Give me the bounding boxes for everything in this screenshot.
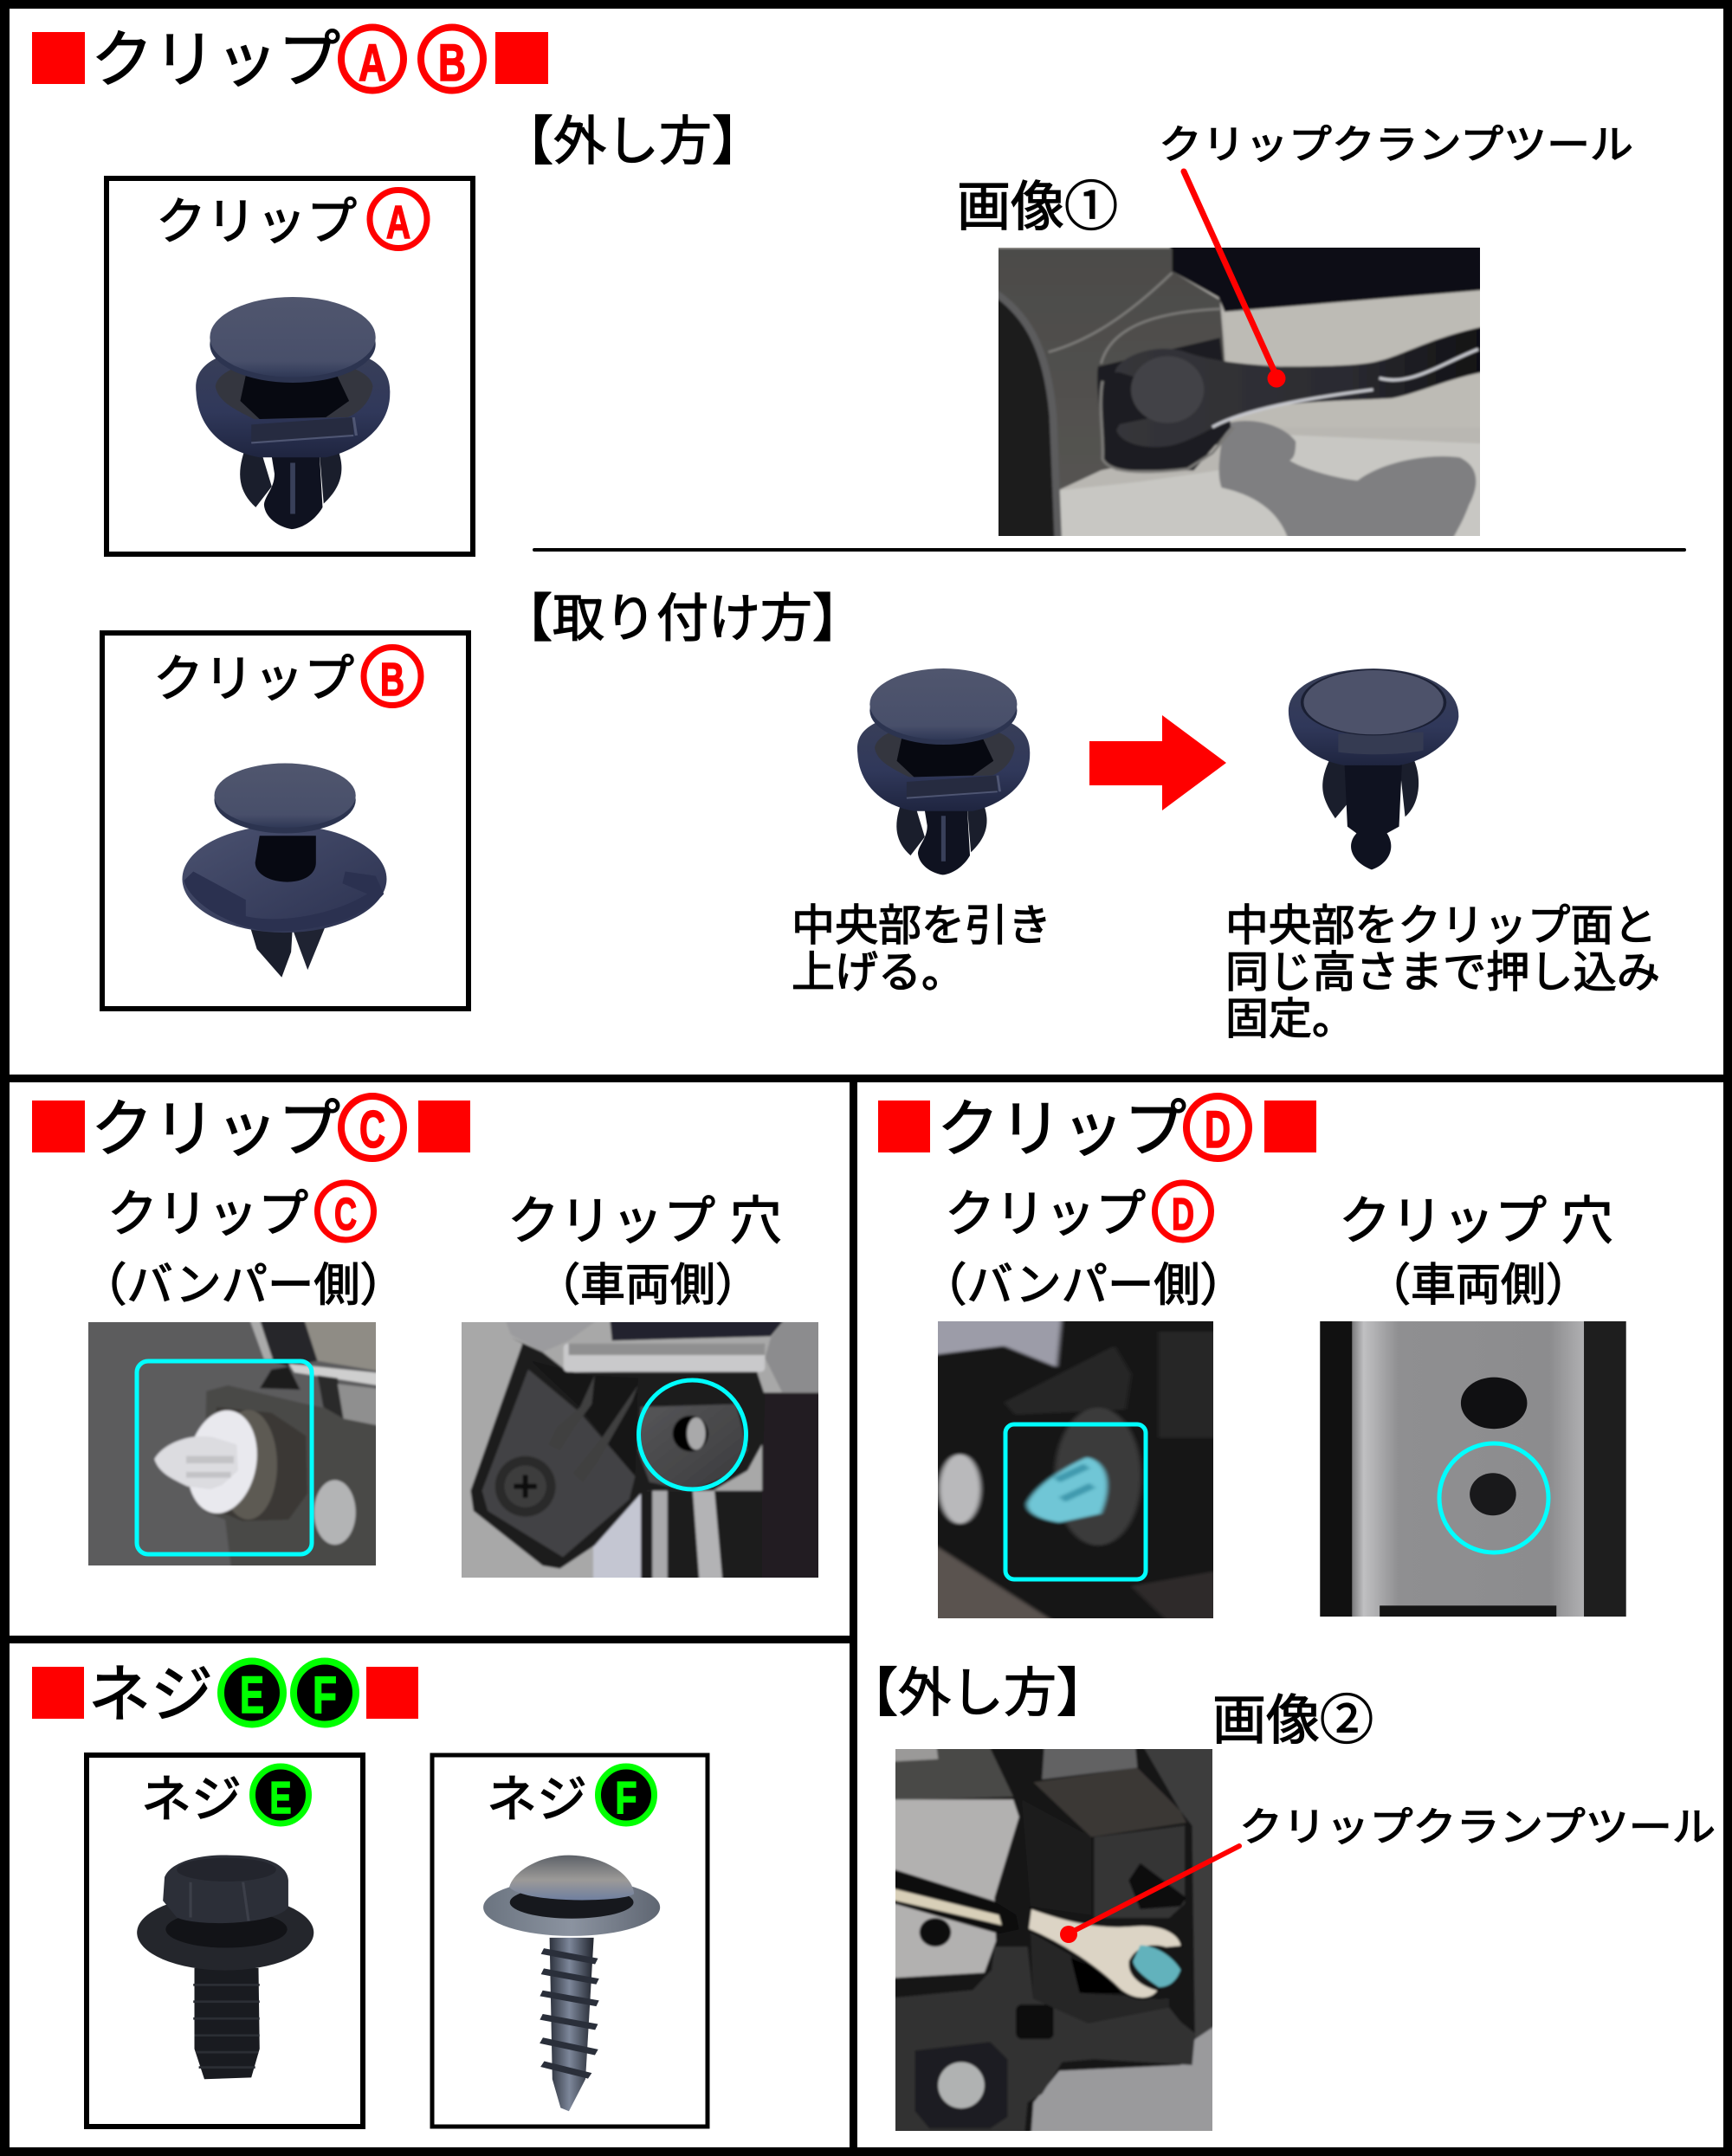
label: clip hole vehicle side <box>1339 1192 1613 1311</box>
panel: screws E F <box>32 1661 708 2127</box>
text: press in <box>1225 901 1660 1043</box>
heading: screws <box>32 1661 418 1730</box>
label: clip D bumper side: D <box>1172 1190 1194 1240</box>
label: image 2: 画像② <box>1212 1691 1373 1751</box>
label: clip C bumper side: （バンパー側） <box>81 1260 406 1311</box>
text: pull up <box>792 901 1051 997</box>
photo: clip B <box>182 763 386 978</box>
panel: clip C <box>32 1095 831 1589</box>
heading: clip A B <box>32 26 548 95</box>
highlight: clip C <box>137 1361 312 1554</box>
box: clip A: クリップ <box>156 194 357 250</box>
heading: screws: E <box>240 1666 264 1724</box>
heading: clip A B: クリップ <box>91 26 340 95</box>
box: clip B <box>102 633 469 1009</box>
box: screw F <box>432 1755 708 2127</box>
heading: clip D: D <box>1205 1101 1231 1159</box>
heading: screws: F <box>313 1666 337 1724</box>
arrow: leader line to tool (image 2) <box>1060 1846 1239 1943</box>
heading: clip D: クリップ <box>937 1095 1186 1165</box>
box: screw E <box>87 1755 363 2127</box>
heading: clip C: クリップ <box>91 1095 340 1165</box>
label: clip D bumper side: クリップ <box>945 1186 1146 1243</box>
text: press in: 固定。 <box>1225 995 1355 1043</box>
label: clip clamp tool: クリップクランプツール <box>1239 1804 1716 1849</box>
text: press in: 中央部をクリップ面と <box>1225 901 1657 950</box>
box: clip A <box>107 178 473 554</box>
box: screw F: F <box>615 1773 637 1824</box>
heading: clip A B: A <box>359 34 386 92</box>
heading: removal: 【外し方】 <box>501 112 765 171</box>
heading: installation: 【取り付け方】 <box>501 590 864 648</box>
label: clip C bumper side: C <box>334 1190 357 1240</box>
label: image 1: 画像① <box>957 178 1118 237</box>
photo: clip C on bumper <box>88 1322 376 1565</box>
label: clip C bumper side <box>81 1183 406 1311</box>
panel: clip D <box>845 1095 1716 2143</box>
box: clip A: A <box>386 197 410 249</box>
arrow: leader line to tool (image 1) <box>1184 171 1285 388</box>
heading: clip C <box>32 1095 470 1165</box>
heading: clip D <box>878 1095 1316 1165</box>
label: clip clamp tool: クリップクランプツール <box>1159 122 1633 167</box>
divider <box>533 548 1686 552</box>
arrow: red <box>1089 715 1226 810</box>
box: clip B: クリップ <box>153 651 354 707</box>
photo: tool on clip D <box>895 1749 1212 2131</box>
photo: clip pressed flush <box>1289 668 1458 869</box>
label: clip hole vehicle side <box>507 1192 782 1311</box>
box: screw E: ネジ <box>141 1772 242 1828</box>
photo: tool on clip <box>998 248 1480 536</box>
box: screw E: E <box>270 1773 291 1824</box>
text: pull up: 上げる。 <box>792 948 965 997</box>
label: clip hole vehicle side: クリップ 穴 <box>1339 1192 1613 1250</box>
photo: clip C hole <box>462 1322 818 1578</box>
highlight: clip D <box>1005 1424 1146 1579</box>
heading: screws: ネジ <box>88 1661 213 1730</box>
photo: clip A <box>196 297 390 529</box>
text: pull up: 中央部を引き <box>792 901 1051 950</box>
heading: removal: 【外し方】 <box>845 1663 1109 1722</box>
label: clip D bumper side <box>921 1183 1246 1311</box>
label: clip hole vehicle side: クリップ 穴 <box>507 1192 782 1250</box>
photo: screw E <box>137 1855 313 2079</box>
box: screw F: ネジ <box>487 1772 587 1828</box>
photo: clip D on bumper <box>938 1321 1213 1618</box>
highlight: clip D hole <box>1439 1443 1548 1552</box>
heading: clip C: C <box>359 1101 385 1159</box>
label: clip D bumper side: （バンパー側） <box>921 1260 1246 1311</box>
photo: clip D hole <box>1320 1321 1626 1618</box>
label: clip C bumper side: クリップ <box>107 1186 308 1243</box>
heading: clip A B: B <box>438 34 466 92</box>
photo: clip pulled up <box>857 668 1030 875</box>
panel: clips A and B <box>32 26 1686 1043</box>
label: clip hole vehicle side: （車両側） <box>535 1261 760 1311</box>
box: clip B: B <box>380 654 404 706</box>
text: press in: 同じ高さまで押し込み <box>1225 948 1660 997</box>
photo: screw F <box>483 1856 660 2111</box>
label: clip hole vehicle side: （車両側） <box>1366 1261 1591 1311</box>
highlight: clip C hole <box>639 1380 746 1489</box>
